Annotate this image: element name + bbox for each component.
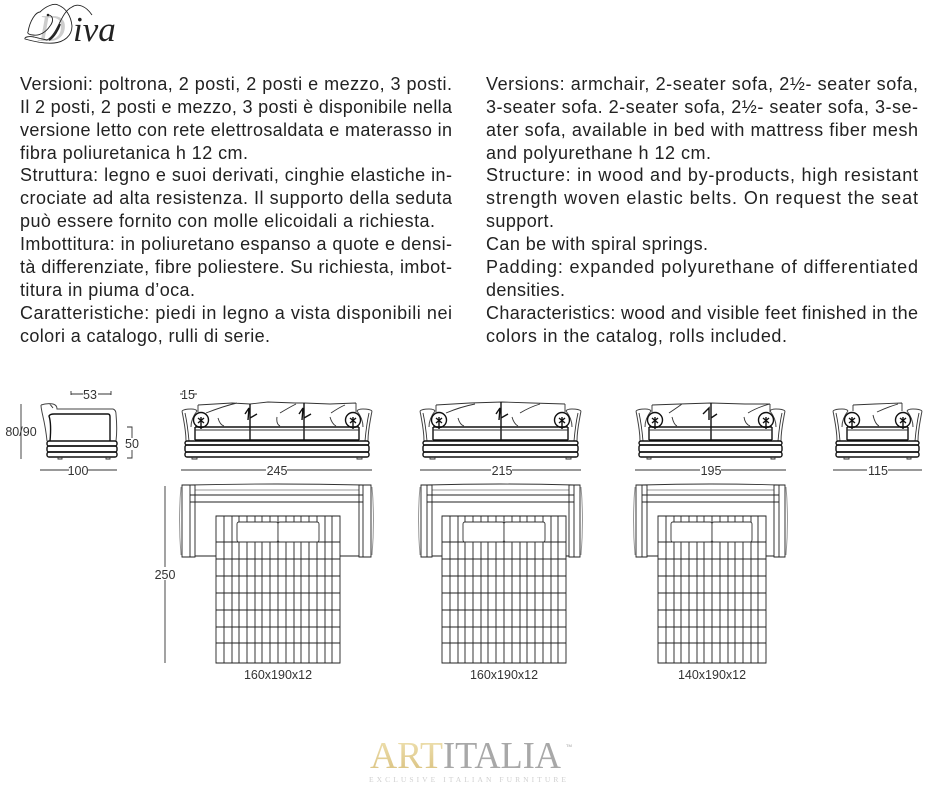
text block: Italian description: può essere fornito con molle elicoidali a richiesta. [20, 211, 435, 231]
text block: English description: 3-seater sofa. 2-seater sofa, 2½- seater sofa, 3-se- [486, 97, 918, 117]
side view sofa with dimensions: 80/90 [5, 425, 37, 439]
front view: 2-seater sofa [636, 403, 785, 459]
dimension: 250: 250 [155, 568, 175, 582]
text block: Italian description: Versioni: poltrona, 2 posti, 2 posti e mezzo, 3 posti. [20, 74, 452, 94]
text block: Italian description: Il 2 posti, 2 posti e mezzo, 3 posti è disponibile nella [20, 97, 453, 117]
side view sofa with dimensions: 53 [83, 388, 97, 402]
dimension: 195: 195 [701, 464, 721, 478]
text block: English description: strength woven elastic belts. On request the seat [486, 188, 918, 208]
side view sofa with dimensions: 50 [125, 437, 139, 451]
text block: English description: densities. [486, 280, 565, 300]
text block: English description: Can be with spiral springs. [486, 234, 708, 254]
title: Diva [25, 4, 116, 50]
text block: Italian description: tà differenziate, fibre poliestere. Su richiesta, imbot- [20, 257, 452, 277]
text block: English description [486, 74, 918, 346]
dimension: 245: 245 [267, 464, 287, 478]
side view sofa with dimensions [5, 388, 139, 478]
text block: English description: Structure: in wood and by-products, high resistant [486, 165, 918, 185]
front view: armchair [833, 403, 922, 459]
text block: Italian description: Struttura: legno e suoi derivati, cinghie elastiche in- [20, 165, 452, 185]
text block: English description: ater sofa, available in bed with mattress fiber mesh [486, 120, 918, 140]
dimension: 115: 115 [868, 464, 888, 478]
text block: English description: Characteristics: wood and visible feet finished in the [486, 303, 918, 323]
dimension: 15: 15 [181, 388, 195, 402]
logo: Artitalia: EXCLUSIVE ITALIAN FURNITURE [369, 775, 566, 784]
text block: English description: and polyurethane h 12 cm. [486, 143, 711, 163]
text block: Italian description: Caratteristiche: piedi in legno a vista disponibili nei [20, 303, 452, 323]
logo: Artitalia: TM [566, 743, 572, 748]
text block: Italian description: crociate ad alta resistenza. Il supporto della seduta [20, 188, 453, 208]
title: Diva: iva [73, 10, 116, 49]
text block: Italian description: titura in piuma d’oca. [20, 280, 195, 300]
logo: Artitalia: ART [370, 735, 443, 777]
dimension: 215: 215 [492, 464, 512, 478]
bed plan 140x190x12 (195 sofa) [634, 484, 788, 682]
text block: Italian description [20, 74, 453, 346]
text block: English description: support. [486, 211, 554, 231]
front view: 2.5-seater sofa [420, 402, 581, 459]
text block: Italian description: fibra poliuretanica h 12 cm. [20, 143, 248, 163]
logo: Artitalia: ITALIA [443, 735, 562, 777]
logo: Artitalia [369, 735, 572, 784]
title: Diva: D [37, 8, 65, 50]
dimension: 115 [833, 464, 922, 478]
text block: Italian description: versione letto con rete elettrosaldata e materasso in [20, 120, 452, 140]
bed plan 160x190x12 (245 sofa): 160x190x12 [244, 668, 312, 682]
text block: Italian description: Imbottitura: in poliuretano espanso a quote e densi- [20, 234, 452, 254]
bed plan 140x190x12 (195 sofa): 140x190x12 [678, 668, 746, 682]
side view sofa with dimensions: 100 [68, 464, 88, 478]
text block: English description: colors in the catalog, rolls included. [486, 326, 787, 346]
bed plan 160x190x12 (215 sofa): 160x190x12 [470, 668, 538, 682]
text block: Italian description: colori a catalogo, rulli di serie. [20, 326, 270, 346]
text block: English description: Versions: armchair, 2-seater sofa, 2½- seater sofa, [486, 74, 918, 94]
bed plan 160x190x12 (215 sofa) [418, 484, 582, 682]
text block: English description: Padding: expanded polyurethane of differentiated [486, 257, 918, 277]
front view: 3-seater sofa [182, 402, 372, 459]
bed plan 160x190x12 (245 sofa) [180, 484, 374, 682]
